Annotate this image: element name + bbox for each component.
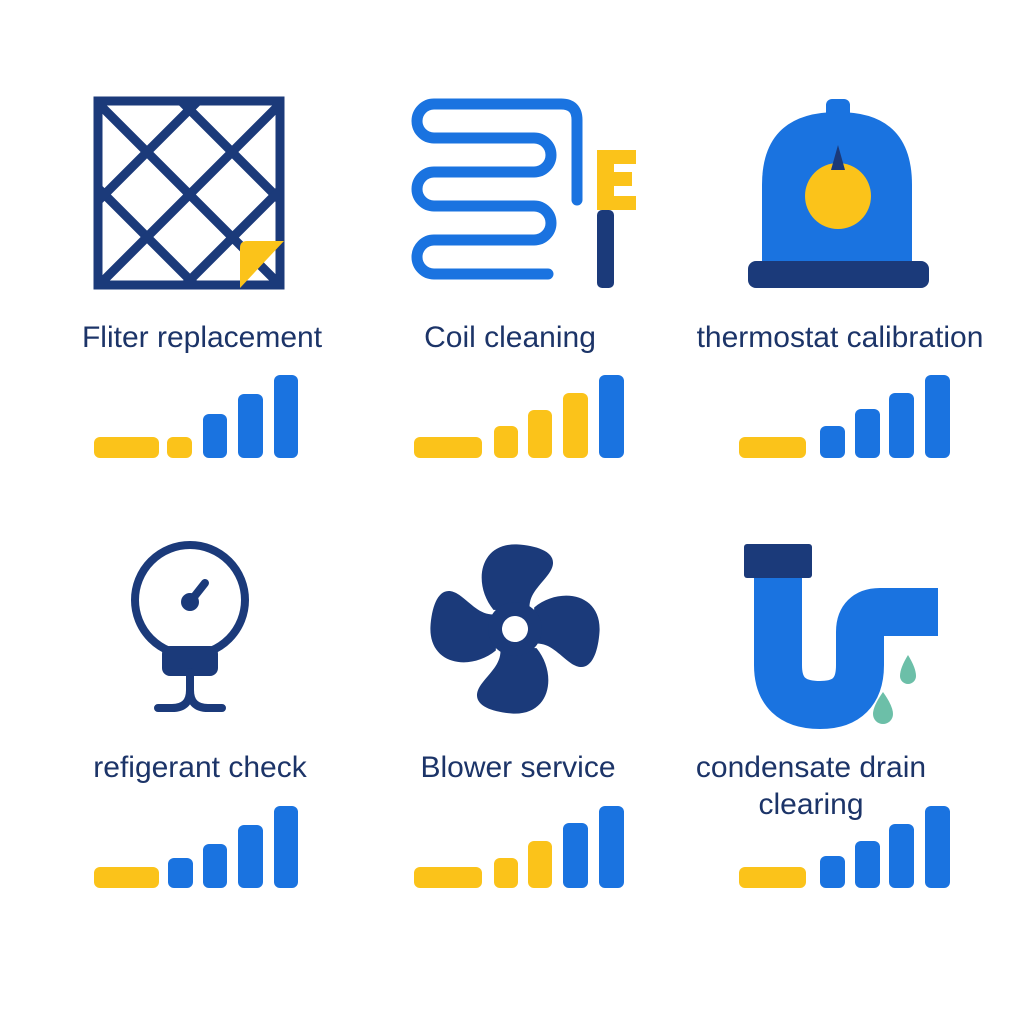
icon: blower fan xyxy=(420,534,610,724)
label: condensate drain clearing xyxy=(696,751,926,821)
label: thermostat calibration: thermostat calibration xyxy=(697,321,983,354)
icon: coil with key xyxy=(417,104,636,288)
chart: thermostat calibration xyxy=(739,375,950,458)
chart: blower service xyxy=(414,806,624,888)
icon: filter xyxy=(94,96,284,290)
icon: thermostat xyxy=(748,99,929,288)
label: coil cleaning: Coil cleaning xyxy=(424,321,596,354)
label: condensate drain clearing: clearing xyxy=(758,788,864,821)
chart: refrigerant check xyxy=(94,806,298,888)
icons and charts xyxy=(94,96,950,888)
label: refrigerant check: refigerant check xyxy=(93,751,307,784)
icon: pressure gauge xyxy=(135,545,245,708)
icon: drain pipe xyxy=(744,544,938,724)
chart: filter replacement xyxy=(94,375,298,458)
chart: condensate drain clearing xyxy=(739,806,950,888)
label: condensate drain clearing: condensate drain xyxy=(696,751,926,784)
chart: coil cleaning xyxy=(414,375,624,458)
label: filter replacement: Fliter replacement xyxy=(82,321,322,354)
label: blower service: Blower service xyxy=(420,751,616,784)
